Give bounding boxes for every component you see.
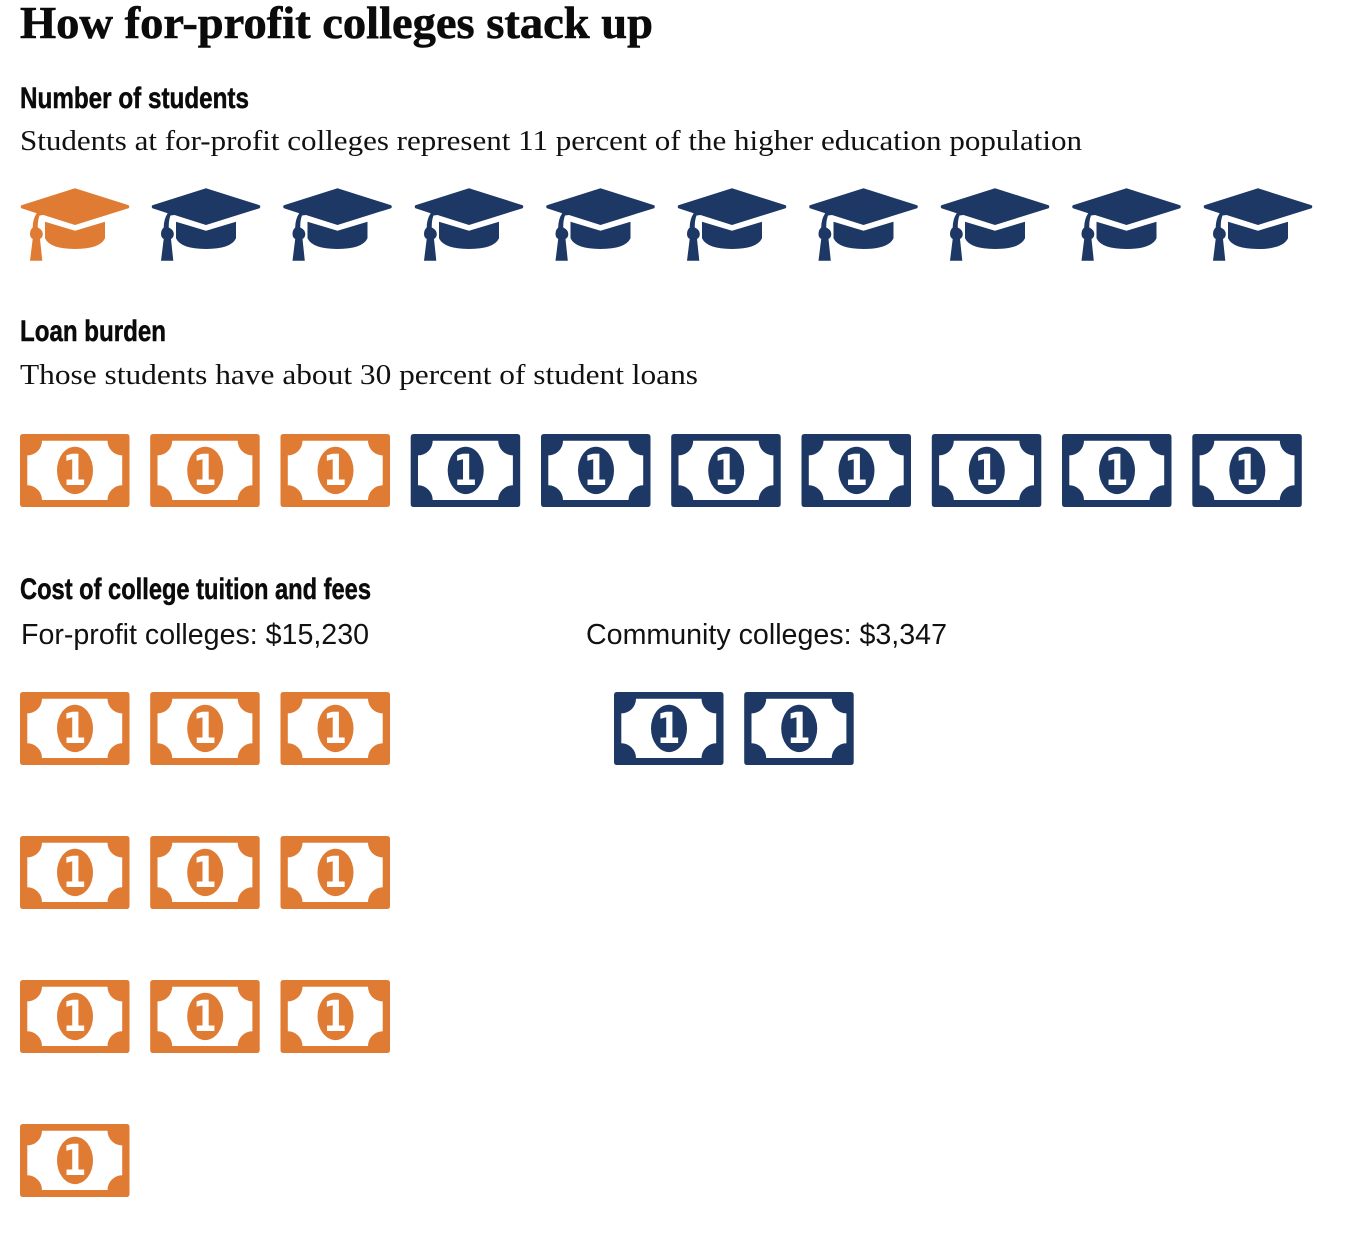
icon: orange dollar bill xyxy=(280,980,390,1053)
icon row: loan dollar bills xyxy=(20,434,1302,507)
icon: navy dollar bill xyxy=(744,692,854,765)
icon row: graduation caps xyxy=(21,188,1312,261)
icon: orange dollar bill xyxy=(150,980,260,1053)
heading: number of students: Number of students xyxy=(20,82,249,115)
icon: orange dollar bill xyxy=(280,434,390,507)
icon: navy graduation cap xyxy=(941,188,1049,261)
icon: navy dollar bill xyxy=(1192,434,1302,507)
text: loan share: Those students have about 30 percent of student loans xyxy=(20,359,698,391)
icon: navy graduation cap xyxy=(678,188,786,261)
icon: orange dollar bill xyxy=(280,836,390,909)
icon: orange dollar bill xyxy=(150,692,260,765)
icon: navy dollar bill xyxy=(541,434,650,507)
panel: cost of college xyxy=(20,573,947,1197)
icon: navy dollar bill xyxy=(614,692,724,765)
panel: loan burden xyxy=(20,315,1302,507)
icon: navy dollar bill xyxy=(411,434,520,507)
icon: navy dollar bill xyxy=(932,434,1041,507)
panel: number of students xyxy=(20,82,1312,261)
heading: loan burden: Loan burden xyxy=(20,315,166,348)
icon: orange graduation cap xyxy=(21,188,129,261)
icon: orange dollar bill xyxy=(20,836,130,909)
icon: navy graduation cap xyxy=(1204,188,1312,261)
icon: navy graduation cap xyxy=(546,188,655,261)
text: students share: Students at for-profit colleges represent 11 percent of the higher education population xyxy=(20,125,1083,157)
icon: orange dollar bill xyxy=(20,434,130,507)
icon: orange dollar bill xyxy=(20,1124,130,1197)
icon: navy dollar bill xyxy=(671,434,781,507)
label: for-profit colleges cost: For-profit colleges: $15,230 xyxy=(21,619,369,651)
icon group: for-profit cost bills xyxy=(20,692,390,1197)
icon: navy dollar bill xyxy=(802,434,911,507)
icon: navy graduation cap xyxy=(1072,188,1181,261)
icon: navy graduation cap xyxy=(152,188,260,261)
icon: navy graduation cap xyxy=(283,188,392,261)
icon: orange dollar bill xyxy=(150,434,260,507)
icon: navy dollar bill xyxy=(1062,434,1172,507)
icon: orange dollar bill xyxy=(280,692,390,765)
heading: cost of college tuition and fees: Cost of college tuition and fees xyxy=(20,573,371,606)
icon: orange dollar bill xyxy=(20,692,130,765)
icon: navy graduation cap xyxy=(809,188,918,261)
icon: orange dollar bill xyxy=(20,980,130,1053)
icon: orange dollar bill xyxy=(150,836,260,909)
icon: navy graduation cap xyxy=(415,188,523,261)
label: community colleges cost: Community colleges: $3,347 xyxy=(586,619,947,651)
icon group: community college cost bills xyxy=(614,692,854,765)
